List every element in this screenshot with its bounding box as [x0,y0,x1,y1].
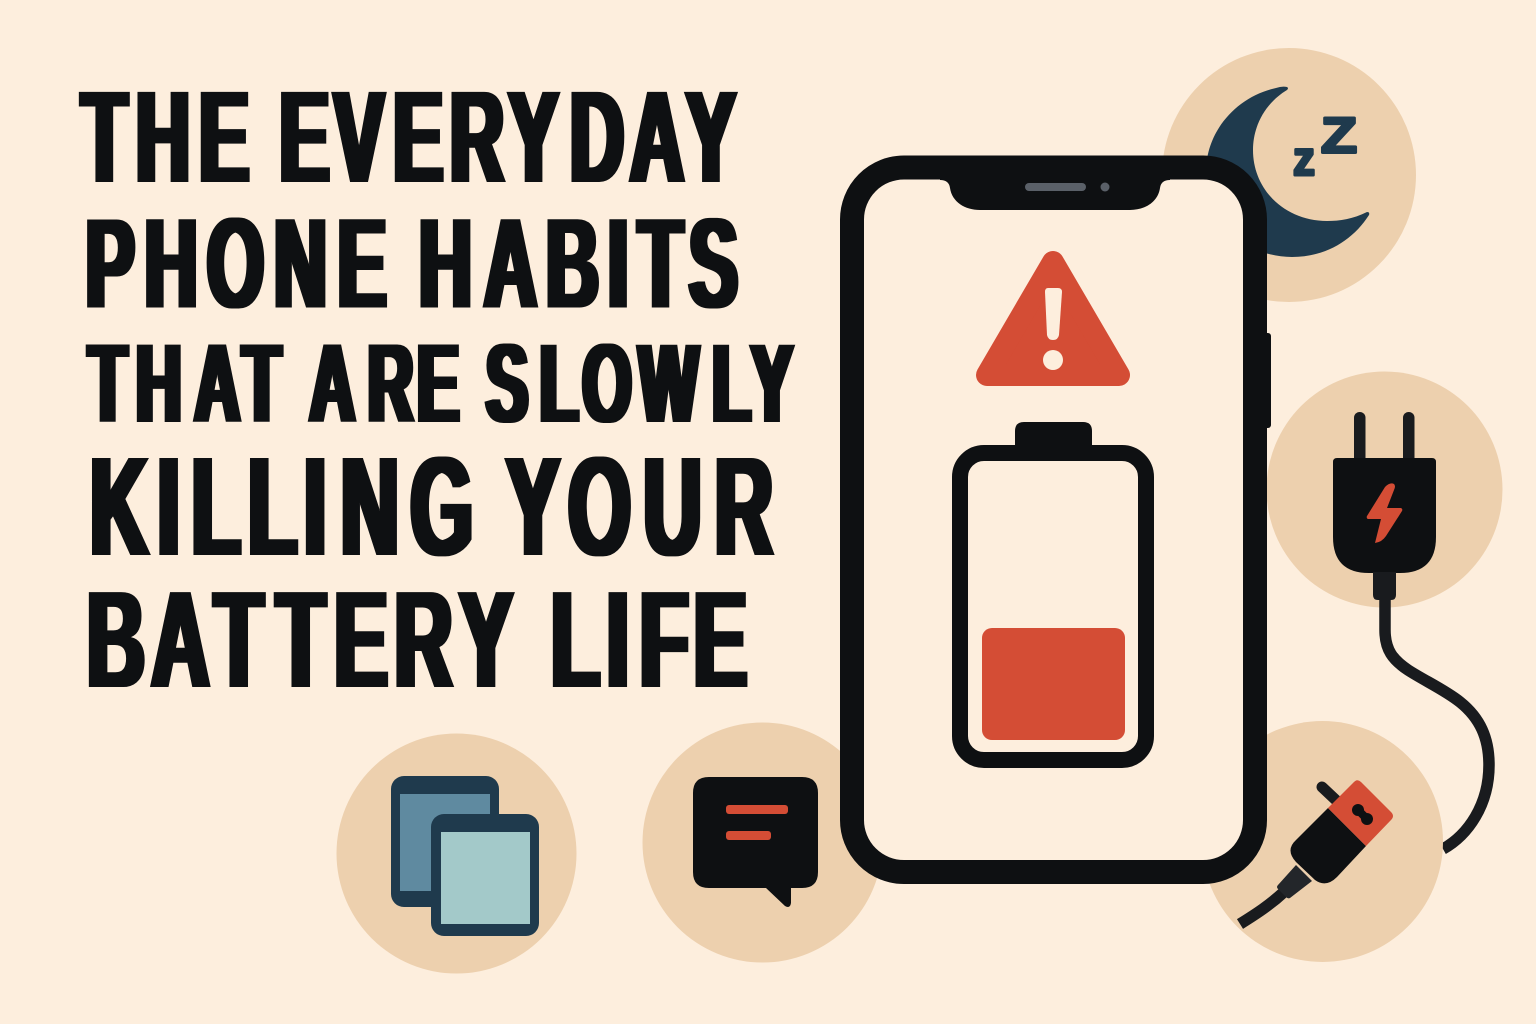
phone [852,168,1271,872]
title: THE EVERYDAY [82,63,736,210]
title: KILLING YOUR [90,428,773,586]
camera [1100,182,1110,192]
icon: overlapping tabs [336,734,576,974]
icon: chat bubble [642,722,882,962]
title: THAT ARE SLOWLY [88,322,793,447]
title [82,63,793,716]
battery charge level [982,628,1125,740]
icon: lightning bolt [1367,483,1402,543]
warning triangle [987,262,1119,375]
battery [960,422,1146,760]
speaker [1025,183,1086,191]
title: PHONE HABITS [86,193,738,336]
icon: moon and sleep: z [1293,133,1315,186]
icon: moon and sleep [1162,48,1416,302]
side button [1260,333,1271,428]
icon: moon and sleep: Z [1321,108,1357,164]
title: BATTERY LIFE [87,562,747,716]
notch [940,178,1170,210]
icon: usb connector [1202,721,1443,962]
phone body [852,168,1255,872]
icon: plug and cable [1266,372,1502,849]
